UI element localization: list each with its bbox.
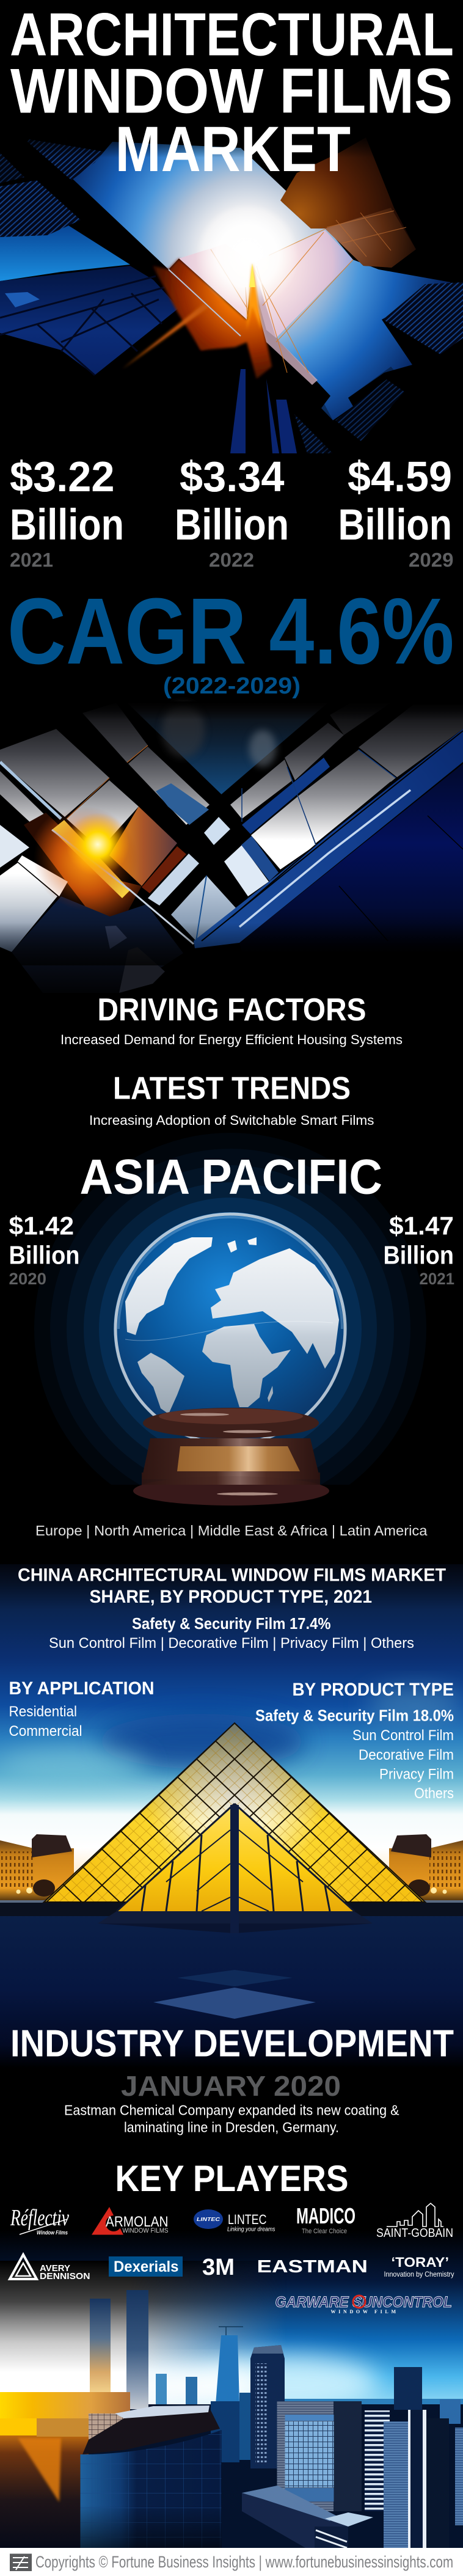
sky <box>0 1564 463 1906</box>
upper centre sky <box>127 703 328 794</box>
striped tower <box>365 2410 390 2511</box>
ground <box>0 1911 463 2068</box>
driving factors: Increased Demand for Energy Efficient Housing Systems <box>60 1032 403 1047</box>
logo: Avery Dennison: AVERY <box>40 2263 70 2274</box>
crane tower <box>211 2327 250 2462</box>
logo: Lintec: Linking your dreams <box>227 2227 275 2233</box>
driving factors <box>60 992 403 1047</box>
centre panes <box>204 817 230 845</box>
stat: 2021: Billion <box>10 501 124 549</box>
Asia Pacific 2020 <box>9 1211 79 1288</box>
logo: Madico: MADICO <box>296 2203 355 2228</box>
stat: 2022: Billion <box>175 501 289 549</box>
China share heading: SHARE, BY PRODUCT TYPE, 2021 <box>89 1587 372 1607</box>
latest trends: Increasing Adoption of Switchable Smart Films <box>89 1113 374 1128</box>
China share values <box>49 1614 414 1652</box>
logo: Dexerials: Dexerials <box>114 2258 178 2275</box>
CAGR: (2022-2029) <box>163 673 301 699</box>
China share values: Safety & Security Film 17.4% <box>132 1614 331 1633</box>
logo: Toray <box>384 2255 454 2278</box>
China share heading: CHINA ARCHITECTURAL WINDOW FILMS MARKET <box>18 1565 446 1585</box>
logo: Madico: The Clear Choice <box>302 2228 347 2235</box>
Asia Pacific 2020: 2020 <box>9 1270 46 1288</box>
orange reflection and sun <box>24 813 142 923</box>
podium <box>242 2486 373 2548</box>
logo: Lintec: LINTEC <box>228 2212 267 2227</box>
lower left dark panels <box>12 896 183 993</box>
small glass pyramid <box>98 1804 373 1933</box>
logo: Toray: Innovation by Chemistry <box>384 2270 454 2278</box>
by application: Commercial <box>9 1723 82 1740</box>
right tower <box>384 2410 463 2548</box>
by product type <box>255 1680 454 1802</box>
latest trends: LATEST TRENDS <box>113 1071 351 1107</box>
China share heading <box>18 1565 446 1607</box>
by product type: Others <box>414 1785 454 1802</box>
logo: Avery Dennison: DENNISON <box>40 2271 90 2281</box>
Asia Pacific 2020: Billion <box>9 1241 79 1270</box>
industry development: JANUARY 2020 <box>121 2070 341 2102</box>
logo: Saint-Gobain: SAINT-GOBAIN <box>376 2227 453 2240</box>
logo: Lintec: LINTEC <box>197 2217 220 2222</box>
logo: Saint-Gobain <box>376 2203 453 2240</box>
stat: 2022: $3.34 <box>180 453 285 500</box>
icon: crystal globe on wooden base <box>114 1212 347 1506</box>
China share values: Sun Control Film | Decorative Film | Privacy Film | Others <box>49 1635 414 1652</box>
globe glow <box>24 1133 440 1540</box>
other regions: Europe | North America | Middle East & Africa | Latin America <box>35 1523 428 1539</box>
left window panels <box>0 703 210 849</box>
market size figures <box>10 453 453 571</box>
building glass image <box>0 701 463 993</box>
large glass pyramid <box>44 1723 425 1902</box>
logo: Avery Dennison <box>10 2255 90 2281</box>
logo: Reflectiv: Réflectiv <box>10 2205 69 2231</box>
wooden base <box>133 1408 329 1506</box>
by product type: Privacy Film <box>379 1766 454 1783</box>
logos <box>10 2203 454 2314</box>
Asia Pacific 2020: $1.42 <box>9 1211 74 1240</box>
stat: 2029 <box>338 453 453 571</box>
by application: BY APPLICATION <box>9 1678 154 1699</box>
paving diamonds <box>153 1970 316 2019</box>
title <box>10 1 454 185</box>
Asia Pacific 2021 <box>384 1211 454 1288</box>
logo: Madico <box>296 2203 355 2235</box>
stat: 2021 <box>10 453 124 571</box>
Louvre wing right <box>389 1834 463 1900</box>
skyline image <box>0 2230 463 2548</box>
lower left sky panes <box>0 825 68 952</box>
pyramid image <box>0 1564 463 2068</box>
logo: Reflectiv: Window Films <box>37 2230 68 2236</box>
by product type: Decorative Film <box>359 1747 454 1763</box>
industry development <box>10 2023 454 2135</box>
dark tower <box>250 2345 285 2468</box>
title: MARKET <box>115 114 351 185</box>
stat: 2021: $3.22 <box>10 453 115 500</box>
Asia Pacific 2021: Billion <box>384 1241 454 1270</box>
hero image: skyscrapers and sun <box>0 131 463 453</box>
by product type: BY PRODUCT TYPE <box>292 1680 454 1700</box>
navy wall <box>239 764 463 959</box>
right panes <box>230 703 463 869</box>
twin towers <box>90 2290 148 2409</box>
reflected building <box>156 783 209 825</box>
yellow sun block <box>0 2392 130 2420</box>
logo: Armolan: WINDOW FILMS <box>122 2227 169 2234</box>
Asia Pacific 2021: 2021 <box>419 1270 454 1288</box>
key players heading: KEY PLAYERS <box>115 2158 348 2199</box>
stat: 2022 <box>175 453 289 571</box>
stat: 2021: 2021 <box>10 549 53 571</box>
by application: Residential <box>9 1703 77 1720</box>
blue frame band <box>194 729 463 948</box>
stat: 2029: 2029 <box>409 549 453 571</box>
logo: Garware SunControl: GARWARE SUNCONTROL <box>275 2294 452 2311</box>
logo: Eastman: EASTMAN <box>257 2257 368 2277</box>
logo: Armolan <box>92 2207 169 2235</box>
logo: Lintec <box>194 2209 275 2233</box>
sun glow <box>34 807 137 910</box>
by application <box>9 1678 154 1740</box>
left buildings <box>0 2418 89 2548</box>
lit window block <box>89 2413 124 2440</box>
curved tower <box>81 2406 221 2548</box>
industry development: Eastman Chemical Company expanded its new coating & <box>64 2102 399 2118</box>
latest trends <box>89 1071 374 1128</box>
driving factors: DRIVING FACTORS <box>98 992 366 1028</box>
logo: Reflectiv <box>10 2205 69 2236</box>
stat: 2029: $4.59 <box>348 453 452 500</box>
sky <box>0 2230 463 2407</box>
icon: Fortune Business Insights logo <box>10 2554 32 2571</box>
footer bar <box>0 2548 463 2576</box>
industry development: laminating line in Dresden, Germany. <box>124 2120 339 2135</box>
far city <box>281 2399 463 2435</box>
logo: Toray: ‘TORAY’ <box>391 2255 449 2270</box>
stat: 2022: 2022 <box>209 549 254 571</box>
Asia Pacific 2021: $1.47 <box>389 1211 454 1240</box>
logo: Armolan: ARMOLAN <box>106 2214 169 2230</box>
logo: Garware SunControl: WINDOW FILM <box>331 2309 396 2314</box>
hotel block <box>277 2401 362 2511</box>
Asia Pacific heading: ASIA PACIFIC <box>79 1150 382 1205</box>
brass plaque <box>177 1446 300 1471</box>
by product type: Sun Control Film <box>352 1727 454 1744</box>
logo: 3M: 3M <box>202 2255 235 2280</box>
Louvre wing left <box>0 1834 74 1900</box>
